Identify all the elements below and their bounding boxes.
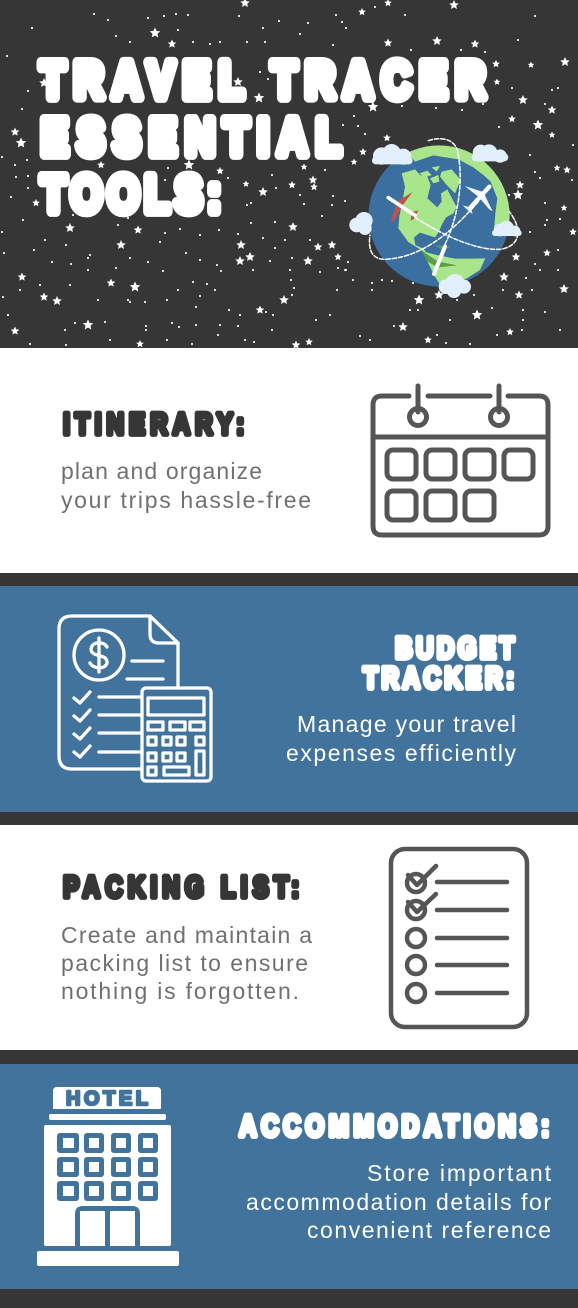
icon: hotel bbox=[37, 1087, 179, 1266]
heading: itinerary: ITINERARY: bbox=[63, 407, 244, 441]
panel: itinerary bbox=[0, 348, 578, 573]
text: itinerary description: plan and organize bbox=[61, 458, 262, 484]
panel: packing list bbox=[0, 825, 578, 1050]
text: accommodations description bbox=[246, 1160, 552, 1243]
title bbox=[40, 51, 485, 223]
icon: checklist bbox=[391, 849, 527, 1027]
title: TRAVEL TRACER bbox=[40, 51, 485, 109]
heading: packing list: PACKING LIST: bbox=[63, 870, 299, 904]
panel: accommodations bbox=[0, 1064, 578, 1289]
green plane bbox=[422, 245, 457, 274]
text: itinerary description: your trips hassle-free bbox=[61, 487, 311, 513]
globe bbox=[368, 143, 513, 287]
text: packing description: Create and maintain a bbox=[61, 922, 312, 948]
text: accommodations description: accommodation details for bbox=[246, 1189, 551, 1215]
text: budget description bbox=[286, 711, 516, 766]
title: TOOLS: bbox=[41, 165, 221, 223]
icon: globe with planes bbox=[349, 139, 522, 298]
title: ESSENTIAL bbox=[41, 108, 341, 166]
icon: hotel: HOTEL bbox=[66, 1088, 148, 1110]
heading: accommodations: ACCOMMODATIONS: bbox=[239, 1109, 549, 1143]
flight paths bbox=[369, 139, 518, 259]
text: accommodations description: convenient reference bbox=[307, 1217, 551, 1243]
star field bbox=[2, 0, 577, 349]
heading: budget tracker: BUDGET bbox=[395, 631, 515, 665]
icon: receipt and calculator bbox=[59, 616, 211, 781]
red plane bbox=[388, 192, 418, 222]
text: packing description: packing list to ensure bbox=[61, 950, 308, 976]
white plane bbox=[463, 186, 493, 214]
icon: calendar bbox=[373, 386, 548, 535]
panel: budget tracker bbox=[0, 586, 578, 812]
text: budget description: Manage your travel bbox=[297, 711, 516, 737]
text: budget description: expenses efficiently bbox=[286, 740, 516, 766]
header panel bbox=[2, 0, 577, 349]
text: itinerary description bbox=[61, 458, 311, 513]
heading: budget tracker: TRACKER: bbox=[363, 661, 514, 695]
text: packing description bbox=[61, 922, 312, 1004]
text: packing description: nothing is forgotten. bbox=[61, 978, 299, 1004]
clouds bbox=[349, 144, 522, 298]
heading: budget tracker bbox=[363, 631, 515, 695]
text: accommodations description: Store important bbox=[367, 1160, 552, 1186]
